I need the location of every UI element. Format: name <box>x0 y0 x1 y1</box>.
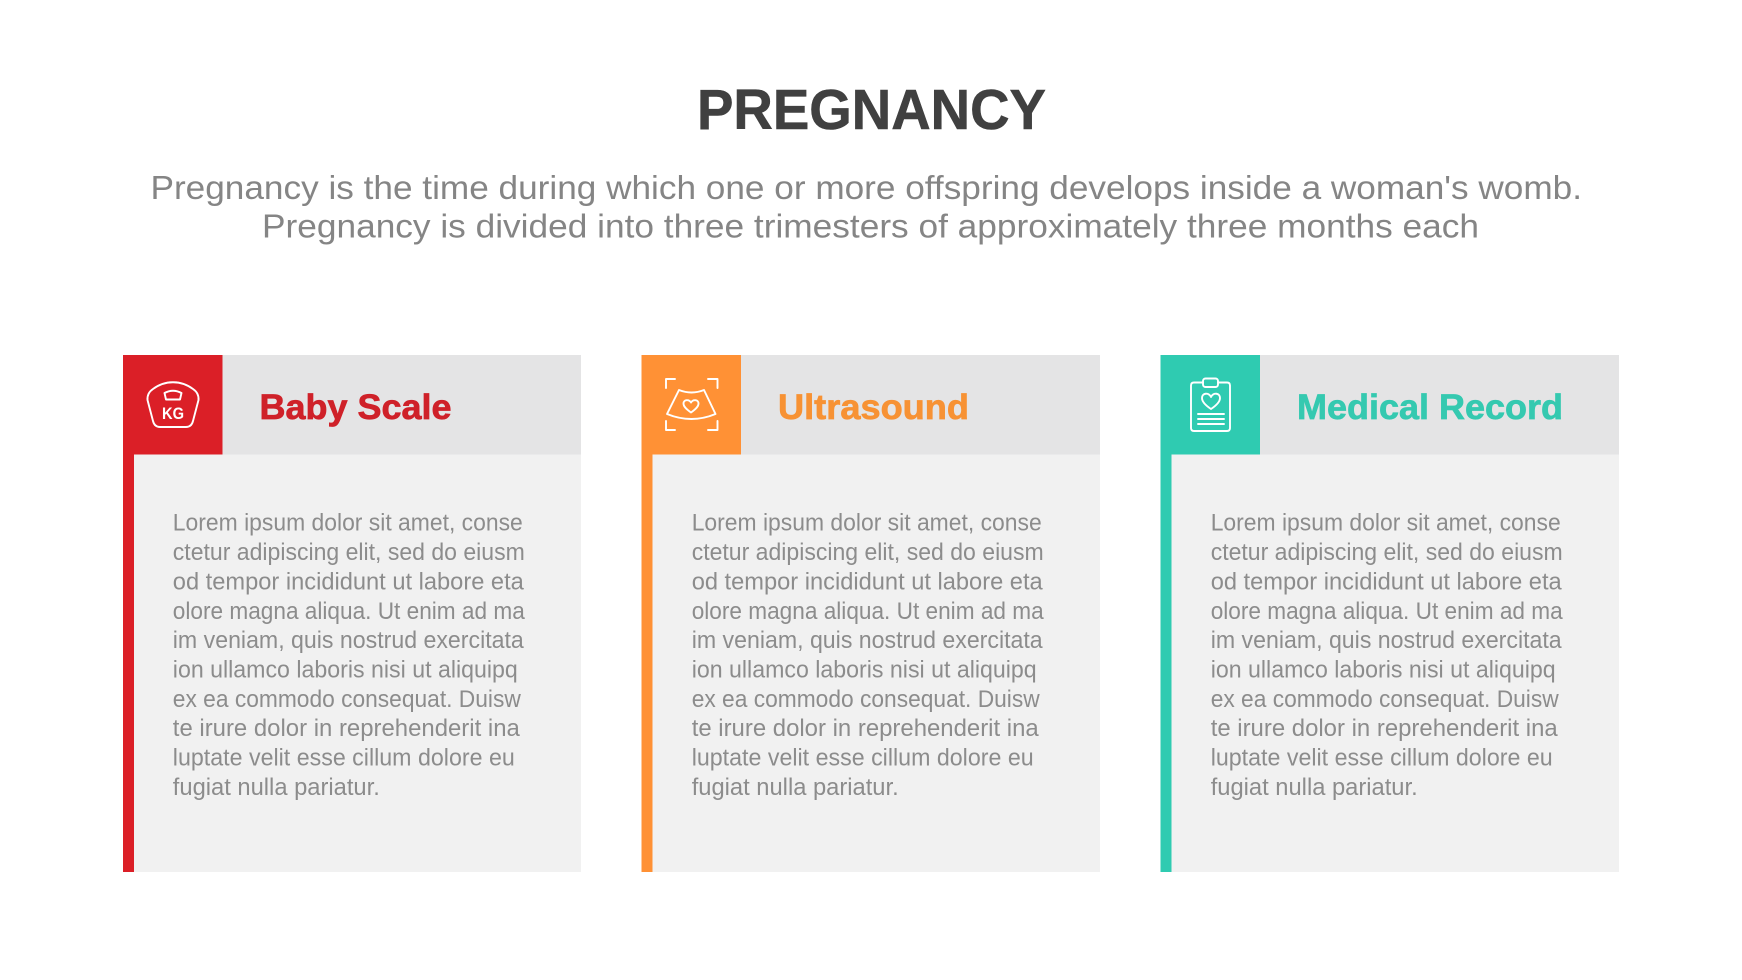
body text: fugiat nulla pariatur. <box>173 774 380 801</box>
body text: olore magna aliqua. Ut enim ad ma <box>1211 598 1563 625</box>
header band <box>741 355 1100 454</box>
body text: luptate velit esse cillum dolore eu <box>1211 745 1553 772</box>
body text: Lorem ipsum dolor sit amet, conse <box>173 510 523 537</box>
body text: olore magna aliqua. Ut enim ad ma <box>692 598 1044 625</box>
body text: olore magna aliqua. Ut enim ad ma <box>173 598 525 625</box>
body text: luptate velit esse cillum dolore eu <box>173 745 515 772</box>
accent bar <box>642 355 652 872</box>
panel background <box>123 355 581 872</box>
body text: im veniam, quis nostrud exercitata <box>692 627 1043 654</box>
body text <box>1211 510 1563 801</box>
header band <box>222 355 581 454</box>
body text: fugiat nulla pariatur. <box>692 774 899 801</box>
subtitle text: Pregnancy is the time during which one or more offspring develops inside a woman's womb. <box>150 169 1582 206</box>
body text: im veniam, quis nostrud exercitata <box>1211 627 1562 654</box>
panel: ultrasound <box>642 355 1100 872</box>
icon tile <box>123 355 222 454</box>
body text: od tempor incididunt ut labore eta <box>173 568 524 595</box>
accent bar <box>123 355 134 872</box>
body text: Lorem ipsum dolor sit amet, conse <box>692 510 1042 537</box>
body text: ion ullamco laboris nisi ut aliquipq <box>1211 656 1556 684</box>
body text: od tempor incididunt ut labore eta <box>1211 568 1562 595</box>
heading: Medical Record <box>1297 388 1563 427</box>
icon: clipboard with heart <box>1191 378 1230 431</box>
body text <box>173 510 525 801</box>
body text: ex ea commodo consequat. Duisw <box>1211 686 1559 713</box>
icon: scale <box>147 382 199 427</box>
body text <box>692 510 1044 801</box>
body text: fugiat nulla pariatur. <box>1211 774 1418 801</box>
body text: ctetur adipiscing elit, sed do eiusm <box>173 539 525 566</box>
accent bar <box>1160 355 1172 872</box>
body text: te irure dolor in reprehenderit ina <box>692 715 1039 742</box>
title: PREGNANCY <box>697 78 1046 142</box>
body text: ctetur adipiscing elit, sed do eiusm <box>692 539 1044 566</box>
icon: ultrasound scan <box>666 379 718 430</box>
panel background <box>1160 355 1619 872</box>
body text: ex ea commodo consequat. Duisw <box>173 686 521 713</box>
body text: luptate velit esse cillum dolore eu <box>692 745 1034 772</box>
icon tile <box>642 355 741 454</box>
body text: ion ullamco laboris nisi ut aliquipq <box>173 656 518 684</box>
panel background <box>642 355 1100 872</box>
heading: Baby Scale <box>260 388 452 427</box>
subtitle text <box>150 169 1582 244</box>
icon tile <box>1160 355 1260 454</box>
icon: scale: KG <box>162 404 184 423</box>
body text: im veniam, quis nostrud exercitata <box>173 627 524 654</box>
body text: od tempor incididunt ut labore eta <box>692 568 1043 595</box>
header band <box>1260 355 1619 454</box>
body text: ctetur adipiscing elit, sed do eiusm <box>1211 539 1563 566</box>
heading: Ultrasound <box>778 388 969 427</box>
subtitle text: Pregnancy is divided into three trimesters of approximately three months each <box>262 208 1479 244</box>
body text: te irure dolor in reprehenderit ina <box>1211 715 1558 742</box>
body text: ex ea commodo consequat. Duisw <box>692 686 1040 713</box>
body text: ion ullamco laboris nisi ut aliquipq <box>692 656 1037 684</box>
body text: Lorem ipsum dolor sit amet, conse <box>1211 510 1561 537</box>
panel: baby scale <box>123 355 581 872</box>
panel: medical record <box>1160 355 1619 872</box>
body text: te irure dolor in reprehenderit ina <box>173 715 520 742</box>
